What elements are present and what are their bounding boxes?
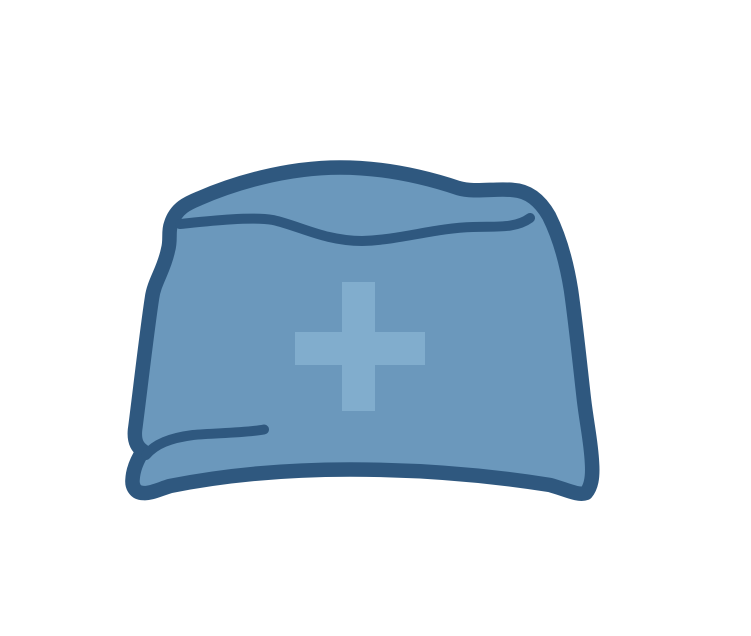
cap bottom fold line xyxy=(146,430,264,455)
cap top fold line xyxy=(180,218,530,241)
cap body xyxy=(132,168,592,494)
medical cross xyxy=(295,282,425,411)
